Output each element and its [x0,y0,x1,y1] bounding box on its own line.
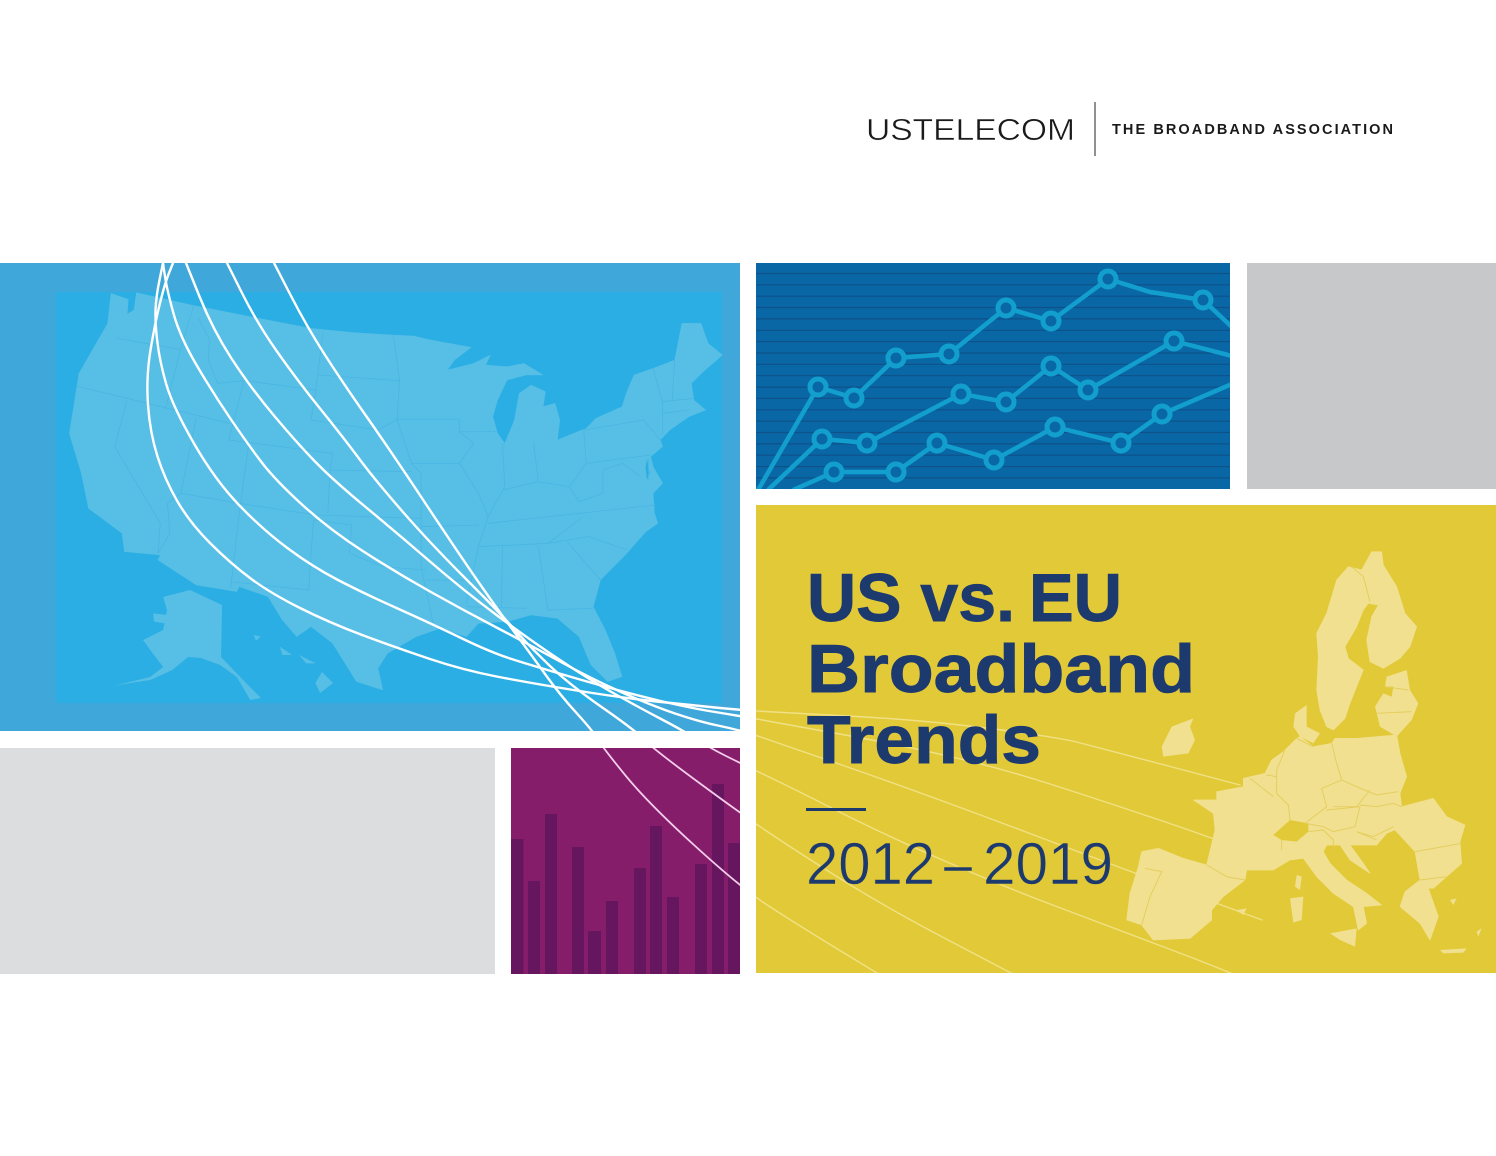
panel: line chart [756,263,1232,490]
title: EU [1029,560,1122,636]
panel: bar chart [511,748,740,974]
date range [806,831,1113,897]
date range: – [944,831,972,897]
bars [511,784,740,974]
map: United States [69,293,723,700]
curves over bar panel [602,748,740,886]
title: US vs. [807,560,1015,636]
title rule [806,808,866,811]
Switzerland cut-out [1273,820,1308,842]
panel: grey block top right [1247,263,1496,489]
logo: USTelecom The Broadband Association: THE BROADBAND ASSOCIATION [1112,122,1393,138]
title [807,560,1195,778]
panel: title with EU map [756,505,1496,973]
title: Trends [807,702,1041,778]
chart lines [758,271,1232,490]
curves over US panel [146,263,740,731]
title: Broadband [807,631,1195,707]
logo: USTelecom The Broadband Association: USTELECOM [866,112,1075,147]
curves over yellow panel [756,710,1263,973]
date range: 2012 [806,831,935,897]
date range: 2019 [983,831,1113,897]
panel: US map [0,263,740,731]
map: Europe [1127,552,1482,953]
panel: light grey block [0,748,495,974]
logo: USTelecom The Broadband Association [866,102,1393,156]
